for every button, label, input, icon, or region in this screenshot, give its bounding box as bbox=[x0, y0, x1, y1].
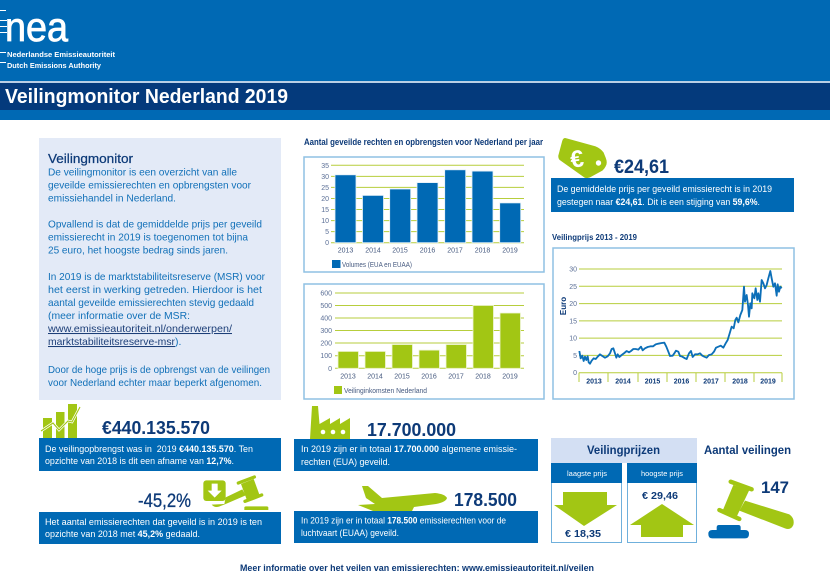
intro text block: 25 euro, het hoogste bedrag sinds jaren. bbox=[48, 246, 228, 256]
callout: EUAA: luchtvaart (EUAA) geveild. bbox=[301, 528, 399, 538]
bar chart: auction revenue: 500 bbox=[320, 303, 332, 310]
bar chart: auction revenue: 2016 bbox=[421, 374, 437, 380]
bar chart: auction revenue: 0 bbox=[328, 366, 332, 373]
callout: volume change: opzichte van 2018 met 45,2% gedaald. bbox=[45, 528, 200, 539]
intro text block: ). bbox=[175, 337, 181, 348]
line chart: auction price 2013-2019: 20 bbox=[569, 301, 577, 308]
icon: up arrow bbox=[630, 504, 694, 537]
icon: factory bbox=[310, 406, 350, 439]
callout: EUAA: In 2019 zijn er in totaal 178.500 emissierechten voor de bbox=[301, 516, 506, 526]
bar chart: volumes: Volumes (EUA en EUAA) bbox=[342, 262, 412, 269]
callout: volume change: Het aantal emissierechten dat geveild is in 2019 is ten bbox=[45, 516, 262, 527]
intro text block: De veilingmonitor is een overzicht van alle bbox=[48, 168, 237, 178]
icon: gavel with down arrow bbox=[203, 477, 268, 510]
bar chart: volumes: 2014 bbox=[365, 248, 381, 254]
bar chart: auction revenue: 600 bbox=[320, 290, 332, 298]
bar chart: auction revenue: 300 bbox=[320, 328, 332, 335]
title: Veilingmonitor Nederland 2019 bbox=[5, 86, 288, 108]
average price figure: €24,61 bbox=[614, 157, 669, 178]
logo: nea: nea bbox=[5, 4, 68, 50]
highest price: hoogste prijs bbox=[641, 469, 683, 478]
EUAA figure: 178.500 bbox=[454, 489, 517, 510]
bar chart: volumes: 2018 bbox=[475, 248, 490, 254]
bar chart: auction revenue: 100 bbox=[320, 353, 332, 360]
highest price: € 29,46 bbox=[642, 490, 678, 502]
bar chart: volumes: 10 bbox=[321, 218, 329, 225]
bar chart: auction revenue: 2014 bbox=[367, 374, 383, 380]
callout: EUA: In 2019 zijn er in totaal 17.700.000 algemene emissie- bbox=[301, 443, 517, 454]
callout: revenue: De veilingopbrengst was in 2019 €440.135.570. Ten bbox=[45, 443, 253, 454]
line chart: auction price 2013-2019: 2016 bbox=[674, 378, 689, 386]
intro text block: marktstabiliteitsreserve-msr bbox=[48, 337, 176, 348]
bar chart: volumes bbox=[304, 157, 544, 272]
line chart: auction price 2013-2019: 2014 bbox=[615, 378, 631, 386]
intro text block: voor Nederland echter maar beperkt afgenomen. bbox=[48, 378, 262, 389]
lowest price: laagste prijs bbox=[567, 469, 607, 478]
line chart: auction price 2013-2019: 15 bbox=[569, 318, 577, 326]
bar chart: auction revenue: 400 bbox=[320, 316, 332, 322]
intro text block: www.emissieautoriteit.nl/onderwerpen/ bbox=[47, 324, 232, 335]
panel: Veilingmonitor introduction bbox=[39, 138, 281, 400]
intro text block: aantal geveilde emissierechten stevig gedaald bbox=[48, 298, 254, 309]
bar chart: volumes: 5 bbox=[325, 229, 329, 236]
line chart: auction price 2013-2019 bbox=[553, 248, 794, 399]
icon: gavel bbox=[708, 482, 794, 538]
icon: euro price tag: € bbox=[569, 145, 586, 174]
bar chart: auction revenue: 2017 bbox=[448, 374, 464, 380]
icon: euro price tag bbox=[559, 139, 606, 177]
line chart: auction price 2013-2019: 2015 bbox=[645, 378, 660, 386]
callout: EUAA bbox=[294, 511, 538, 543]
callout: revenue bbox=[39, 438, 281, 471]
intro text block: In 2019 is de marktstabiliteitsreserve (MSR) voor bbox=[48, 272, 266, 283]
intro text block: emissierecht in 2019 is toegenomen tot bijna bbox=[48, 232, 248, 244]
bar chart: auction revenue bbox=[304, 284, 544, 399]
line chart: auction price 2013-2019: 30 bbox=[569, 266, 577, 274]
intro text block: Door de hoge prijs is de opbrengst van de veilingen bbox=[48, 365, 270, 376]
line chart: auction price 2013-2019: 10 bbox=[569, 336, 577, 342]
intro text block: het eerst in werking getreden. Hierdoor is het bbox=[48, 285, 262, 296]
bar chart: volumes: 2019 bbox=[502, 248, 518, 254]
bar chart: volumes: 25 bbox=[321, 185, 329, 192]
line chart: auction price 2013-2019: 5 bbox=[573, 353, 577, 360]
icon: airplane bbox=[358, 486, 447, 511]
bar chart: volumes: 2013 bbox=[338, 248, 353, 254]
bar chart: volumes: 20 bbox=[321, 196, 329, 203]
lowest price bbox=[551, 463, 622, 542]
bar chart: volumes: 35 bbox=[321, 163, 329, 170]
line chart: auction price 2013-2019: 2017 bbox=[703, 378, 719, 386]
intro text block: Opvallend is dat de gemiddelde prijs per geveild bbox=[48, 220, 262, 230]
number of auctions figure: 147 bbox=[761, 478, 789, 497]
highest price bbox=[627, 463, 697, 542]
logo: nea: Dutch Emissions Authority bbox=[7, 61, 101, 70]
line chart: auction price 2013-2019: 2019 bbox=[760, 378, 776, 386]
intro text block bbox=[47, 168, 270, 389]
revenue figure: €440.135.570 bbox=[102, 417, 210, 438]
footer link: Meer informatie over het veilen van emissierechten: www.emissieautoriteit.nl/veilen bbox=[240, 563, 594, 573]
header band bbox=[0, 0, 830, 120]
callout: revenue: opzichte van 2018 is dit een afname van 12,7%. bbox=[45, 455, 234, 466]
bar chart: volumes: 30 bbox=[321, 174, 329, 181]
logo: nea bbox=[0, 4, 116, 70]
heading: auction price: Veilingprijs 2013 - 2019 bbox=[552, 232, 637, 242]
bar chart: volumes: 2017 bbox=[447, 248, 463, 254]
bar chart: auction revenue: 2015 bbox=[394, 374, 410, 380]
line chart: auction price 2013-2019: 2013 bbox=[586, 378, 602, 386]
bar chart: auction revenue: 200 bbox=[320, 340, 332, 348]
panel heading: Veilingmonitor bbox=[48, 151, 134, 166]
volume change figure: -45,2% bbox=[138, 491, 191, 512]
line chart: auction price 2013-2019: 25 bbox=[569, 284, 577, 291]
bar chart: auction revenue: 2013 bbox=[340, 374, 356, 380]
bar chart: volumes: 0 bbox=[325, 240, 329, 247]
callout: EUA: rechten (EUA) geveild. bbox=[301, 456, 390, 467]
heading: number of auctions: Aantal veilingen bbox=[704, 445, 791, 457]
bar chart: auction revenue: 2019 bbox=[502, 374, 518, 380]
bar chart: auction revenue: 2018 bbox=[475, 374, 491, 380]
bar chart: volumes: 2015 bbox=[392, 248, 408, 254]
EUA figure: 17.700.000 bbox=[367, 419, 456, 440]
line chart: auction price 2013-2019: 2018 bbox=[732, 378, 748, 386]
callout: average price: gestegen naar €24,61. Dit is een stijging van 59,6%. bbox=[557, 196, 760, 207]
heading: volumes and revenue per year: Aantal geveilde rechten en opbrengsten voor Nederland per jaar bbox=[304, 137, 543, 147]
icon: rising bars bbox=[41, 404, 80, 438]
bar chart: volumes: 2016 bbox=[420, 248, 435, 254]
callout: volume change bbox=[39, 512, 281, 544]
panel heading: Veilingprijzen bbox=[587, 445, 660, 457]
line chart: auction price 2013-2019: Euro bbox=[559, 297, 568, 315]
intro text block: geveilde emissierechten en opbrengsten voor bbox=[48, 180, 252, 192]
bar chart: auction revenue: Veilinginkomsten Nederland bbox=[344, 388, 427, 395]
intro text block: emissiehandel in Nederland. bbox=[48, 194, 176, 204]
panel: auction prices bbox=[551, 438, 697, 542]
callout: average price: De gemiddelde prijs per geveild emissierecht is in 2019 bbox=[557, 183, 772, 194]
line chart: auction price 2013-2019: 0 bbox=[573, 370, 577, 377]
intro text block: (meer informatie over de MSR: bbox=[48, 311, 190, 322]
bar chart: volumes: 15 bbox=[321, 207, 329, 214]
callout: EUA bbox=[294, 439, 538, 471]
logo: nea: Nederlandse Emissieautoriteit bbox=[7, 50, 116, 59]
lowest price: € 18,35 bbox=[565, 528, 601, 540]
icon: down arrow bbox=[554, 492, 617, 526]
callout: average price bbox=[551, 178, 794, 212]
